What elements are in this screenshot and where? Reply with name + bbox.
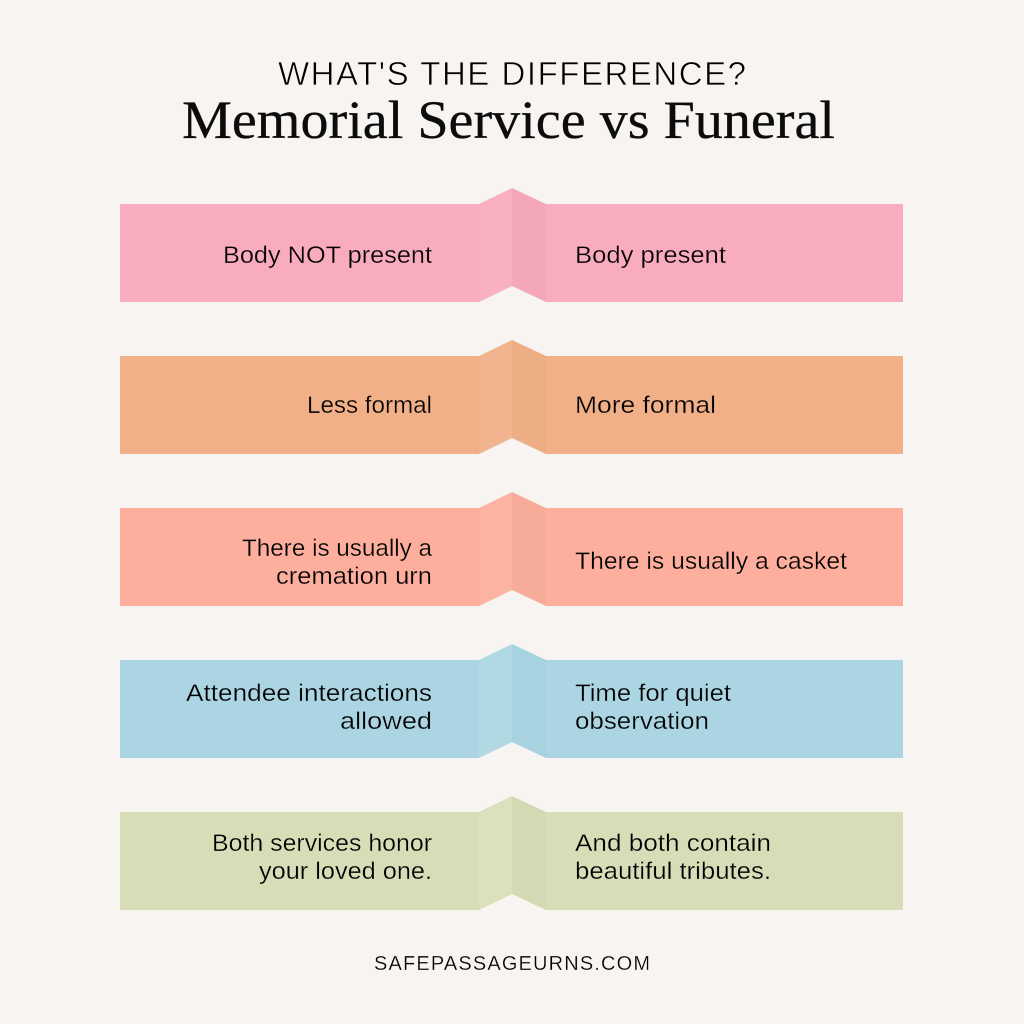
text: funeral tributes: beautiful tributes. — [575, 858, 771, 885]
text: memorial body: Body NOT present — [223, 242, 432, 269]
row 2: formality — [120, 340, 903, 454]
footer: website: SAFEPASSAGEURNS.COM — [374, 953, 650, 975]
text: memorial honor: Both services honor — [212, 830, 432, 857]
text: memorial urn: There is usually a — [242, 535, 433, 562]
text: funeral observation: Time for quiet — [575, 680, 731, 707]
text: memorial urn: cremation urn — [276, 563, 432, 590]
text: funeral observation — [575, 680, 731, 735]
title: eyebrow: WHAT'S THE DIFFERENCE? — [278, 55, 746, 92]
text: funeral tributes — [575, 830, 771, 885]
text: memorial interactions: allowed — [340, 708, 432, 735]
text: memorial urn — [242, 535, 433, 590]
text: memorial honor: your loved one. — [259, 858, 432, 885]
text: funeral body: Body present — [575, 242, 726, 269]
row 4: interaction — [120, 644, 903, 758]
text: funeral casket: There is usually a casket — [575, 548, 847, 575]
title: main heading: Memorial Service vs Funeral — [182, 90, 835, 150]
text: memorial interactions: Attendee interactions — [186, 680, 432, 707]
row 1: body presence — [120, 188, 903, 302]
text: memorial honor — [212, 830, 432, 885]
text: funeral observation: observation — [575, 708, 709, 735]
text: memorial formality: Less formal — [307, 392, 432, 419]
text: funeral tributes: And both contain — [575, 830, 771, 857]
text: funeral formality: More formal — [575, 392, 716, 419]
row 5: shared — [120, 796, 903, 910]
row 3: urn or casket — [120, 492, 903, 606]
text: memorial interactions — [186, 680, 432, 735]
